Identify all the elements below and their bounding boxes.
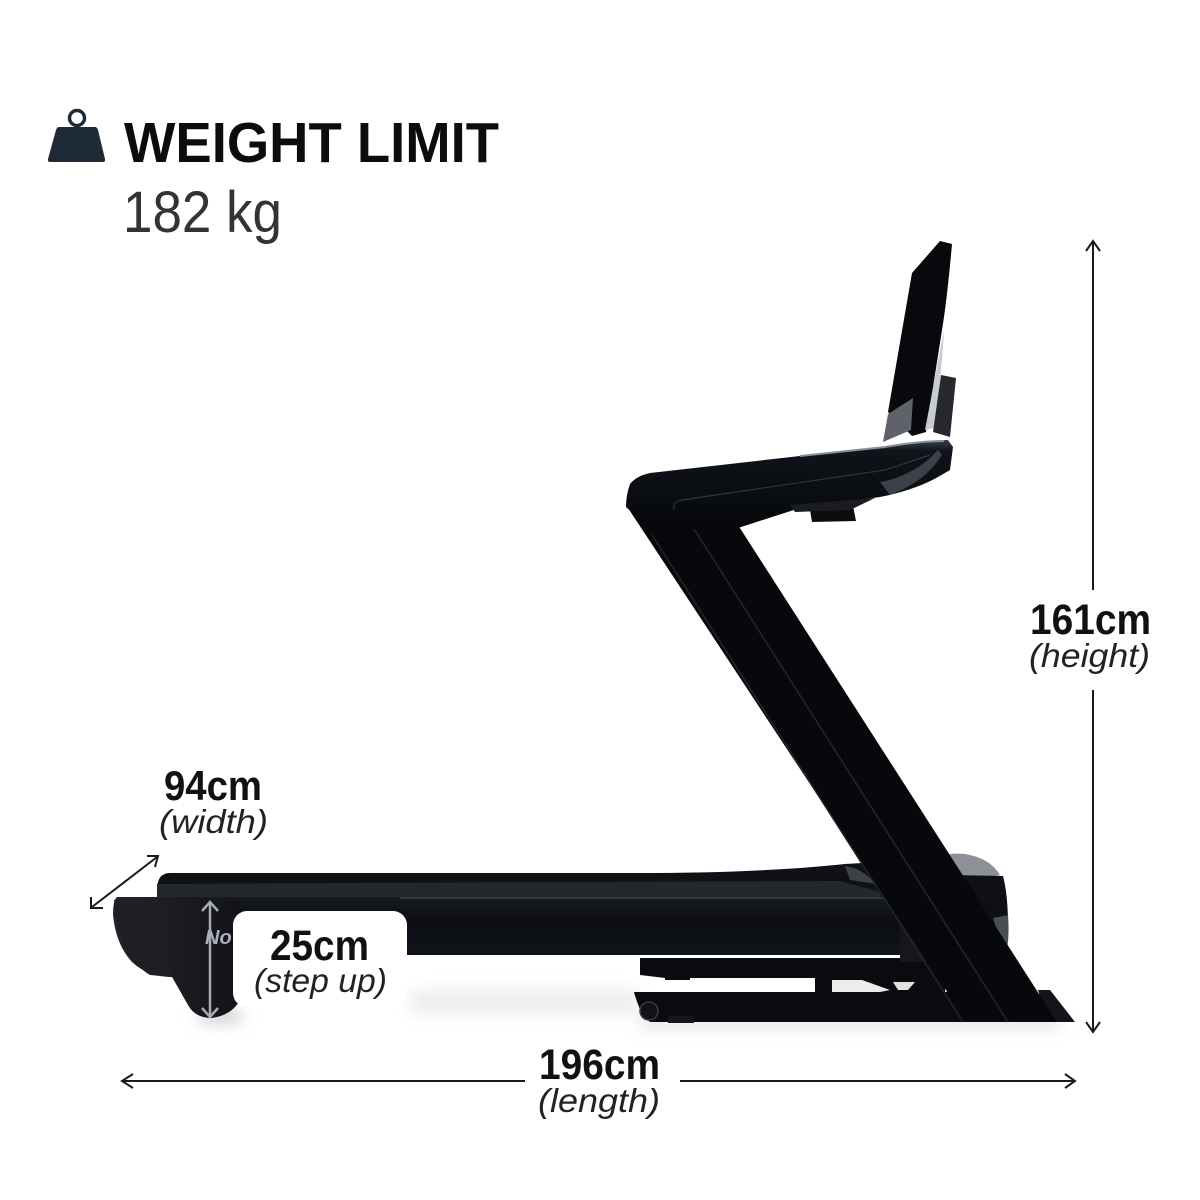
text: weight value: 182 kg [123, 180, 282, 245]
phone bracket [933, 375, 956, 437]
label: height: (height) [1029, 637, 1150, 674]
heading: weight limit: WEIGHT LIMIT [124, 111, 499, 175]
label: length: 196cm [539, 1041, 660, 1089]
label: width [159, 762, 268, 840]
callout: step up: 25cm [270, 922, 369, 970]
front end cap [113, 897, 240, 1018]
arrow: length [122, 1074, 1075, 1088]
treadmill [113, 241, 1075, 1023]
logo fragment: No [205, 927, 232, 949]
label: height: 161cm [1030, 596, 1151, 644]
deck top and belt [157, 862, 895, 900]
deck side rail [150, 897, 920, 955]
arrow: width [91, 856, 158, 908]
floor shadow [200, 990, 1060, 1025]
base frame and incline mechanism [634, 954, 1075, 1023]
rear motor cap [930, 854, 1009, 958]
label: length [538, 1041, 660, 1119]
icon: weight [48, 110, 105, 162]
arrow: step up [202, 902, 218, 1017]
label: height [1029, 596, 1151, 674]
handlebar [626, 440, 953, 530]
callout: step up: (step up) [254, 962, 387, 999]
display screen [883, 241, 952, 442]
label: width: 94cm [164, 762, 262, 809]
label: length: (length) [538, 1082, 660, 1119]
arrow: height [1086, 241, 1100, 1032]
upright post [626, 505, 1057, 1022]
callout: step up [233, 911, 407, 1007]
label: width: (width) [159, 803, 268, 840]
